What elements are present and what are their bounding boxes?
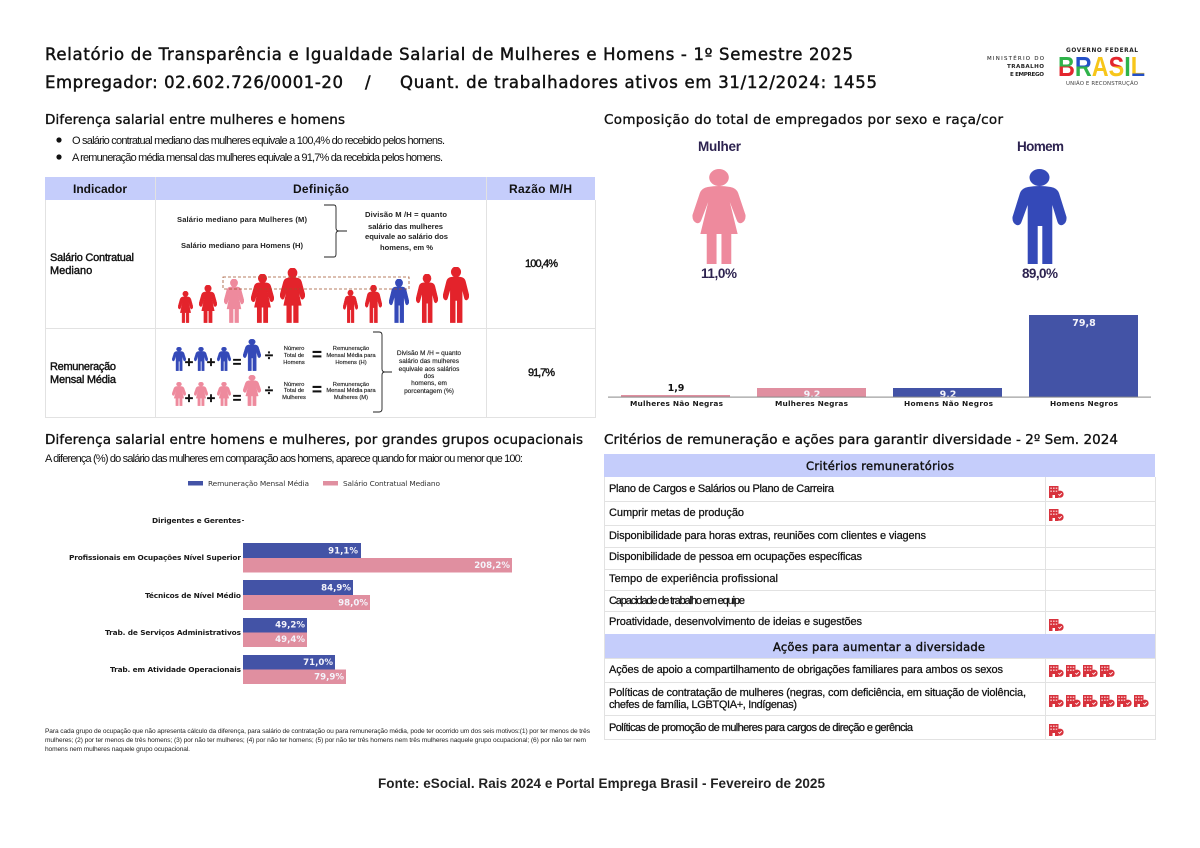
title: Relatório de Transparência e Igualdade Salarial de Mulheres e Homens - 1º Semestre 2025	[45, 45, 853, 64]
definition: remuneração média: Número	[284, 382, 304, 388]
legend	[188, 479, 440, 488]
definition: remuneração média: equivale aos salários	[399, 366, 460, 373]
category: atividade operacional: 71,0%	[303, 658, 333, 668]
definition: remuneração média: ÷	[265, 382, 273, 399]
logo: governo federal brasil: GOVERNO FEDERAL	[1066, 48, 1138, 54]
band: critérios remuneratórios: Critérios remuneratórios	[806, 459, 954, 473]
definition: remuneração média: porcentagem (%)	[404, 388, 454, 395]
definition: remuneração média: Mensal Média para	[326, 388, 376, 394]
title: Empregador: 02.602.726/0001-20	[45, 73, 343, 92]
logo: ministério do trabalho e emprego: TRABALHO	[1007, 64, 1044, 70]
panel: mulher: Mulher	[698, 139, 742, 154]
source: Fonte: eSocial. Rais 2024 e Portal Emprega Brasil - Fevereiro de 2025	[378, 776, 825, 791]
definition: remuneração média: +	[185, 390, 194, 407]
panel: tabela de indicadores: Razão M/H	[509, 182, 572, 196]
category: dirigentes: Dirigentes e Gerentes	[152, 516, 242, 525]
definition: remuneração média: Mulheres (M)	[334, 395, 368, 401]
bar chart: sexo e raça/cor: Homens Não Negros	[904, 399, 994, 408]
definition: salário mediano: salário das mulheres	[368, 222, 443, 231]
title	[45, 45, 877, 92]
list: critérios: Tempo de experiência profissional	[609, 573, 778, 585]
bar chart: sexo e raça/cor: Mulheres Negras	[775, 399, 849, 408]
category: serviços administrativos: Trab. de Serviços Administrativos	[105, 628, 242, 637]
category: atividade operacional: Trab. em Atividade Operacionais	[110, 665, 242, 674]
definition: remuneração média: Total de	[284, 353, 304, 359]
icons: ações	[1049, 665, 1149, 736]
panel: mulher	[692, 139, 746, 281]
list: critérios: Disponibilidade de pessoa em ocupações específicas	[609, 551, 862, 563]
row label: remuneração	[50, 361, 117, 386]
figures: mediana	[178, 267, 469, 323]
list: critérios: Cumprir metas de produção	[609, 507, 744, 519]
definition: remuneração média: salário das mulheres	[399, 358, 460, 365]
list: ações: Políticas de promoção de mulheres para cargos de direção e gerência	[609, 722, 914, 734]
legend: Salário Contratual Mediano	[343, 479, 440, 488]
definition: salário mediano: Divisão M /H = quanto	[365, 210, 447, 219]
list: critérios	[609, 483, 926, 628]
definition: remuneração média: +	[185, 354, 194, 371]
footnote	[45, 728, 591, 753]
list: ações: Ações de apoio a compartilhamento de obrigações familiares para ambos os sexos	[609, 664, 1004, 676]
heading: grupos ocupacionais: Diferença salarial entre homens e mulheres, por grandes grupos ocupacionais	[45, 432, 583, 448]
definition: remuneração média: Homens	[283, 360, 305, 366]
definition: salário mediano: homens, em %	[380, 243, 433, 252]
value: 91,7%: 91,7%	[528, 367, 555, 379]
panel: mulher: 11,0%	[701, 266, 737, 281]
category: técnicos	[145, 580, 370, 610]
list: ações	[609, 664, 1026, 734]
bullet list	[56, 135, 445, 164]
definition: remuneração média: Remuneração	[333, 346, 369, 352]
definition: salário mediano	[177, 205, 448, 257]
category: atividade operacional: 79,9%	[314, 672, 344, 682]
list: critérios: Capacidade de trabalho em equipe	[609, 595, 745, 607]
subtitle: A diferença (%) do salário das mulheres em comparação aos homens, aparece quando for maior ou menor que 100:	[45, 453, 523, 465]
definition: remuneração média: +	[207, 390, 216, 407]
legend: Remuneração Mensal Média	[208, 479, 309, 488]
row label: remuneração: Mensal Média	[50, 374, 117, 386]
footnote: mulheres; (2) por ter menos de três homens; (3) por não ter mulheres; (4) por não ter homens; (5) por não ter três homens nem três mulheres naquele grupo ocupacional; (6) por não ter nem	[45, 737, 586, 744]
definition: remuneração média: Número	[284, 346, 304, 352]
heading: composição: Composição do total de empregados por sexo e raça/cor	[604, 112, 1003, 128]
bar chart: sexo e raça/cor: 1,9	[668, 383, 684, 394]
list: critérios: Disponibilidade para horas extras, reuniões com clientes e viagens	[609, 530, 926, 542]
definition: remuneração média	[172, 332, 461, 412]
list: ações: chefes de família, LGBTQIA+, Indígenas)	[609, 699, 797, 711]
bullet list: A remuneração média mensal das mulheres equivale a 91,7% da recebida pelos homens.	[72, 152, 443, 164]
category: técnicos: Técnicos de Nível Médio	[145, 591, 241, 600]
bullet list: O salário contratual mediano das mulheres equivale a 100,4% do recebido pelos homens.	[72, 135, 445, 147]
category: profissionais	[69, 543, 512, 572]
definition: remuneração média: Mulheres	[282, 395, 306, 401]
definition: remuneração média: ÷	[265, 347, 273, 364]
definition: remuneração média: Mensal Média para	[326, 353, 376, 359]
definition: remuneração média: =	[312, 345, 322, 364]
category: serviços administrativos	[105, 618, 307, 647]
bar chart: sexo e raça/cor: 9,2	[804, 390, 820, 400]
bar chart: grupos ocupacionais	[69, 516, 512, 684]
category: serviços administrativos: 49,2%	[275, 620, 305, 630]
bar chart: sexo e raça/cor: Homens Negros	[1050, 399, 1119, 408]
bar chart: sexo e raça/cor: Mulheres Não Negras	[630, 399, 724, 408]
row label: salário contratual	[50, 252, 134, 277]
definition: remuneração média: dos	[424, 373, 435, 380]
list: critérios: Proatividade, desenvolvimento de ideias e sugestões	[609, 616, 862, 628]
category: profissionais: 91,1%	[328, 546, 358, 556]
definition: salário mediano: equivale ao salário dos	[365, 232, 448, 241]
heading: diferença salarial: Diferença salarial entre mulheres e homens	[45, 112, 345, 128]
definition: remuneração média: =	[312, 380, 322, 399]
heading: critérios: Critérios de remuneração e ações para garantir diversidade - 2º Sem. 2024	[604, 432, 1118, 448]
list: critérios: Plano de Cargos e Salários ou Plano de Carreira	[609, 483, 835, 495]
value: 100,4%: 100,4%	[525, 258, 558, 270]
definition: remuneração média: Remuneração	[333, 382, 369, 388]
logo: governo federal brasil: UNIÃO E RECONSTRUÇÃO	[1066, 80, 1138, 87]
category: atividade operacional	[110, 655, 346, 684]
logo: ministério do trabalho e emprego: E EMPREGO	[1010, 72, 1044, 78]
row label: salário contratual: Salário Contratual	[50, 252, 134, 264]
category: técnicos: 98,0%	[338, 598, 368, 608]
panel: homem: 89,0%	[1022, 266, 1058, 281]
definition: remuneração média: +	[207, 354, 216, 371]
panel: tabela de indicadores: Definição	[293, 182, 349, 196]
panel: tabela de indicadores	[45, 177, 596, 418]
bar chart: sexo e raça/cor: 9,2	[940, 390, 956, 400]
definition: remuneração média: Homens (H)	[335, 360, 367, 366]
category: serviços administrativos: 49,4%	[275, 635, 305, 645]
definition: remuneração média: Total de	[284, 388, 304, 394]
category: profissionais: 208,2%	[474, 561, 510, 571]
definition: salário mediano: Salário mediano para Homens (H)	[181, 241, 303, 250]
logo: ministério do trabalho e emprego	[987, 54, 1044, 78]
category: técnicos: 84,9%	[321, 584, 351, 594]
row label: remuneração: Remuneração	[50, 361, 116, 373]
logo: governo federal brasil: BRASIL	[1058, 51, 1145, 82]
definition: remuneração média: homens, em	[411, 380, 447, 387]
panel: critérios e ações	[604, 454, 1156, 740]
definition: remuneração média: =	[233, 354, 242, 371]
definition: remuneração média: Divisão M /H = quanto	[397, 350, 461, 357]
footnote: homens nem mulheres naquele grupo ocupacional.	[45, 746, 190, 753]
title: /	[365, 73, 371, 92]
title: Quant. de trabalhadores ativos em 31/12/2024: 1455	[400, 73, 877, 92]
definition: salário mediano: Salário mediano para Mulheres (M)	[177, 215, 307, 224]
logo: ministério do trabalho e emprego: MINISTÉRIO DO	[987, 54, 1044, 62]
row label: salário contratual: Mediano	[50, 265, 92, 277]
panel: tabela de indicadores: Indicador	[73, 182, 127, 196]
bar chart: sexo e raça/cor	[608, 315, 1151, 408]
list: ações: Políticas de contratação de mulheres (negras, com deficiência, em situação de violência,	[609, 687, 1026, 699]
icons: critérios	[1049, 486, 1064, 631]
footnote: Para cada grupo de ocupação que não apresenta cálculo da diferença, para salário de contratação ou para remuneração média, pode ter ocorrido um dos seis motivos:(1) por ter menos de três	[45, 728, 591, 735]
bar chart: sexo e raça/cor: 79,8	[1072, 318, 1096, 329]
panel: homem: Homem	[1017, 139, 1064, 154]
panel: homem	[1012, 139, 1067, 281]
definition: remuneração média: =	[233, 390, 242, 407]
category: profissionais: Profissionais em Ocupações Nível Superior	[69, 553, 241, 562]
band: ações: Ações para aumentar a diversidade	[773, 640, 985, 654]
